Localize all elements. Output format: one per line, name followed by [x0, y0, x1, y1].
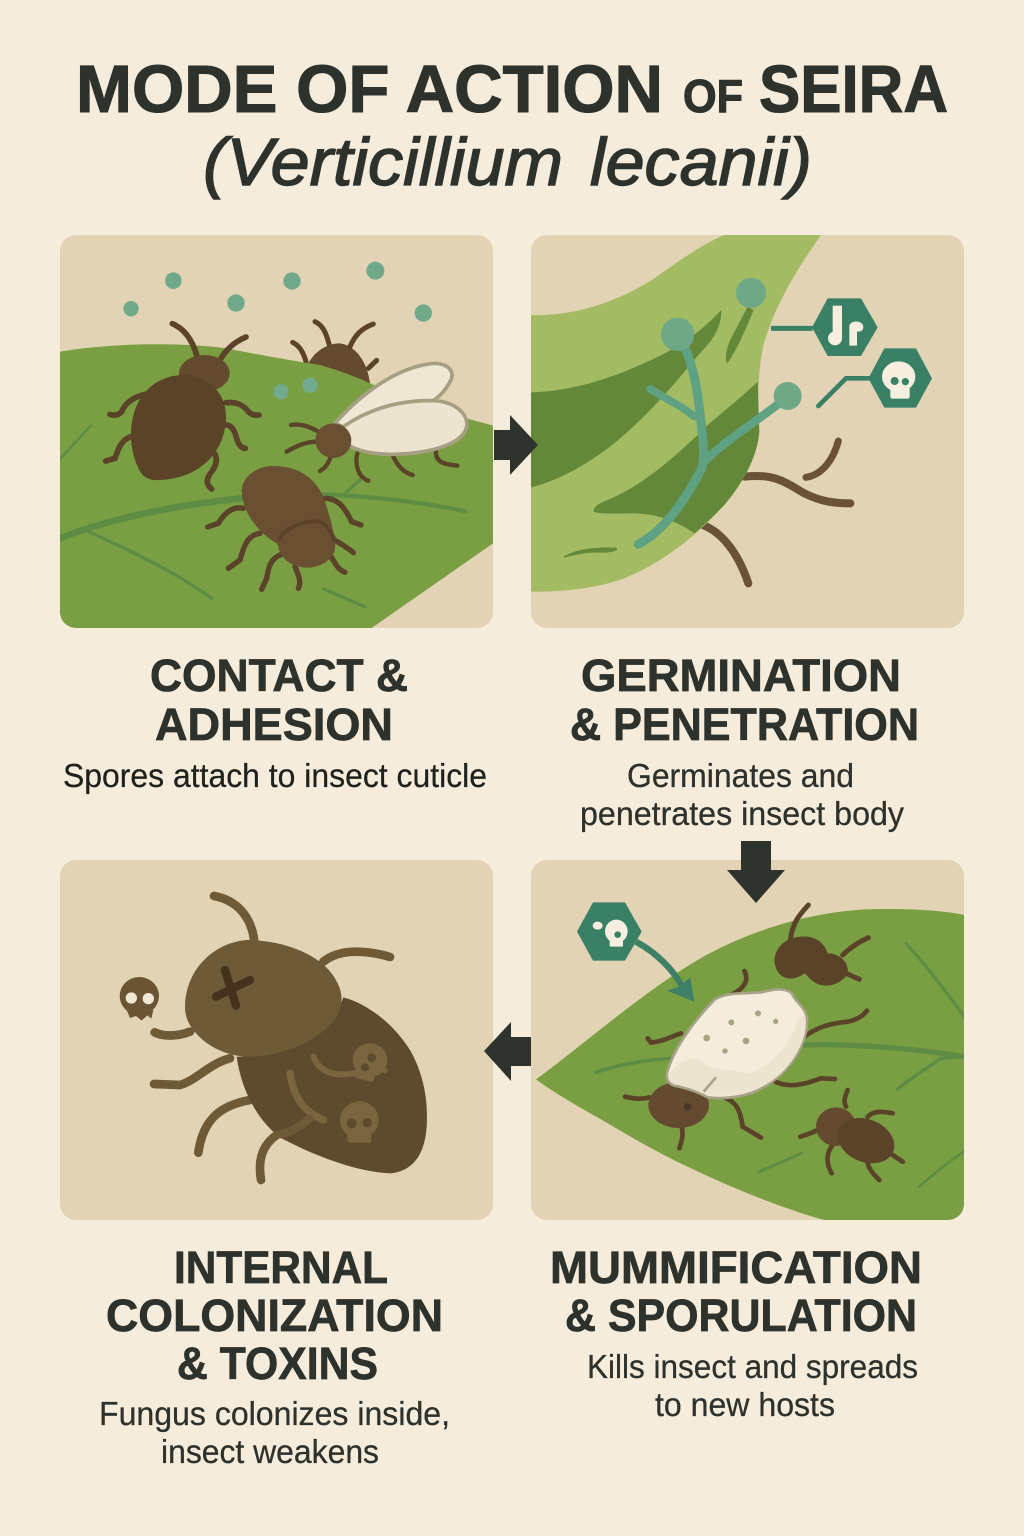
title [76, 52, 948, 200]
insect limbs [703, 441, 850, 583]
leaf dark bands [531, 307, 759, 558]
internal skull 2 [340, 1101, 379, 1143]
icon: toxin skull hexagon [818, 348, 932, 408]
title: (Verticillium [203, 125, 563, 200]
arrow: step 1 to 2 [494, 415, 538, 475]
dead eye X [216, 970, 250, 1006]
title: SEIRA [759, 52, 948, 127]
heading: mummification and sporulation: & SPORULATION [565, 1290, 917, 1341]
title: lecanii) [590, 125, 812, 200]
arrow: step 2 to 3 [727, 841, 785, 903]
text: germination description [580, 757, 904, 832]
text: colonization description [99, 1395, 450, 1470]
whitefly [287, 363, 467, 481]
heading: internal colonization and toxins: COLONIZATION [106, 1290, 443, 1341]
internal fungal growth [277, 1057, 353, 1135]
aphid 2 [208, 466, 361, 589]
text: germination description: penetrates insect body [580, 795, 904, 832]
icon: toxin arrow [636, 942, 694, 1002]
text: colonization description: insect weakens [161, 1433, 379, 1470]
title: MODE OF ACTION [76, 52, 663, 127]
insect limbs [154, 896, 390, 1180]
fungal hyphae [638, 347, 779, 544]
leaf veins [596, 943, 964, 1187]
heading: mummification and sporulation: MUMMIFICATION [550, 1242, 922, 1293]
heading: germination and penetration: & PENETRATION [570, 699, 919, 750]
arrow: step 3 to 4 [484, 1022, 531, 1081]
insect head [185, 940, 342, 1057]
panel: contact and adhesion illustration [60, 235, 493, 628]
text: colonization description: Fungus colonizes inside, [99, 1395, 450, 1432]
insect top [774, 905, 868, 986]
spores on leaf [273, 378, 318, 399]
text: mummification description: to new hosts [655, 1386, 835, 1423]
icon: temperature hexagon [771, 298, 878, 356]
heading: contact and adhesion: CONTACT & [150, 650, 408, 701]
heading: germination and penetration [570, 650, 919, 750]
leaf [536, 909, 964, 1220]
leaf veins [60, 426, 465, 607]
heading: contact and adhesion: ADHESION [155, 699, 393, 750]
icon: skull [120, 977, 159, 1021]
title: OF [683, 70, 743, 122]
heading: germination and penetration: GERMINATION [581, 650, 901, 701]
heading: internal colonization and toxins: INTERNAL [174, 1242, 388, 1293]
panel: mummification and sporulation illustration [531, 860, 964, 1220]
leaf [60, 344, 493, 628]
heading: contact and adhesion [150, 650, 408, 750]
mummified insect [625, 971, 867, 1148]
text: contact description: Spores attach to insect cuticle [63, 757, 487, 794]
insect lower right [800, 1090, 903, 1180]
text: mummification description [587, 1348, 918, 1423]
aphid 1 [106, 324, 259, 489]
panel: germination and penetration illustration [531, 235, 964, 628]
internal skull 1 [352, 1043, 388, 1082]
airborne spores [123, 262, 432, 322]
icon: skull hexagon [577, 902, 642, 961]
insect abdomen [237, 997, 427, 1173]
leaf [531, 235, 821, 592]
heading: mummification and sporulation [550, 1242, 922, 1341]
text: mummification description: Kills insect and spreads [587, 1348, 918, 1385]
text: germination description: Germinates and [627, 757, 854, 794]
heading: internal colonization and toxins [106, 1242, 443, 1389]
spore heads [661, 278, 802, 410]
heading: internal colonization and toxins: & TOXINS [177, 1338, 378, 1389]
background insect [293, 322, 377, 383]
panel: internal colonization illustration [60, 860, 493, 1220]
